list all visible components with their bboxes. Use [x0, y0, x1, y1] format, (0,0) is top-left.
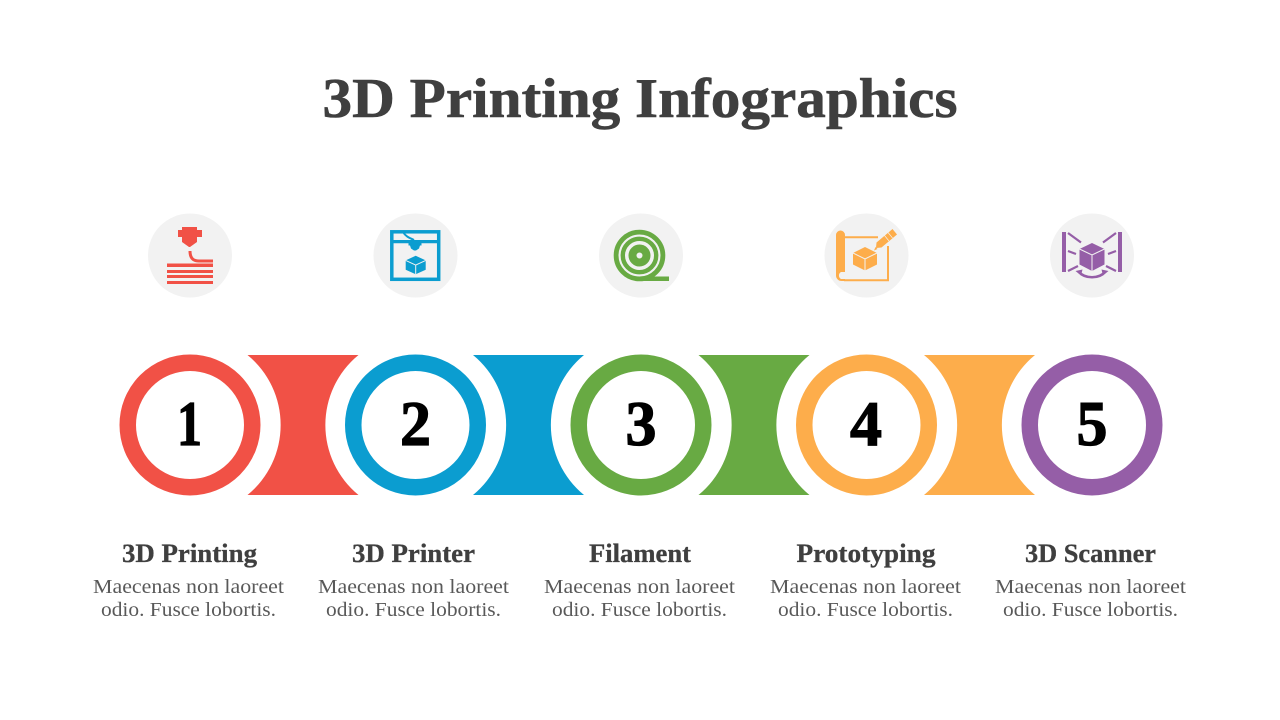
- text block: Prototyping: Prototyping: [796, 539, 936, 568]
- text block: Prototyping: [770, 539, 961, 621]
- step 5 ring: [1030, 363, 1154, 487]
- icon: nozzle printing layers: [148, 214, 232, 298]
- step 1 ring: [128, 363, 252, 487]
- text block: 3D Printing: [93, 539, 284, 621]
- text block: 3D Printing: odio. Fusce lobortis.: [101, 599, 276, 621]
- step 4 ring: [804, 363, 929, 487]
- icon: filament roll: [599, 214, 683, 298]
- step 2 ring: [353, 363, 478, 487]
- text block: 3D Printer: Maecenas non laoreet: [318, 576, 509, 598]
- text block: Filament: odio. Fusce lobortis.: [552, 599, 727, 621]
- text block: 3D Printer: odio. Fusce lobortis.: [326, 599, 501, 621]
- connector: green: [698, 355, 810, 495]
- step 3 ring: [579, 363, 703, 487]
- icon: prototyping blueprint: [824, 214, 908, 298]
- step 2 ring: 2: [400, 389, 431, 459]
- text block: Filament: Maecenas non laoreet: [544, 576, 735, 598]
- text block: Filament: Filament: [589, 539, 691, 568]
- text block: Filament: [544, 539, 735, 621]
- text block: 3D Scanner: 3D Scanner: [1025, 539, 1156, 568]
- step 1 ring: 1: [177, 389, 202, 459]
- text block: 3D Scanner: [995, 539, 1186, 621]
- connector: orange: [924, 355, 1035, 495]
- icon: 3D scanner: [1050, 214, 1134, 298]
- text block: 3D Scanner: odio. Fusce lobortis.: [1003, 599, 1178, 621]
- text block: Prototyping: Maecenas non laoreet: [770, 576, 961, 598]
- text block: 3D Printing: Maecenas non laoreet: [93, 576, 284, 598]
- text block: 3D Scanner: Maecenas non laoreet: [995, 576, 1186, 598]
- step 3 ring: 3: [626, 389, 656, 459]
- text block: 3D Printer: 3D Printer: [352, 539, 475, 568]
- connector: blue: [473, 355, 584, 495]
- connector: red: [248, 355, 358, 495]
- text block: 3D Printer: [318, 539, 509, 621]
- text block: 3D Printing: 3D Printing: [122, 539, 257, 568]
- title: 3D Printing Infographics: [322, 68, 958, 130]
- icon: 3D printer: [374, 214, 458, 298]
- step 4 ring: 4: [850, 389, 882, 459]
- text block: Prototyping: odio. Fusce lobortis.: [778, 599, 953, 621]
- step 5 ring: 5: [1076, 389, 1108, 459]
